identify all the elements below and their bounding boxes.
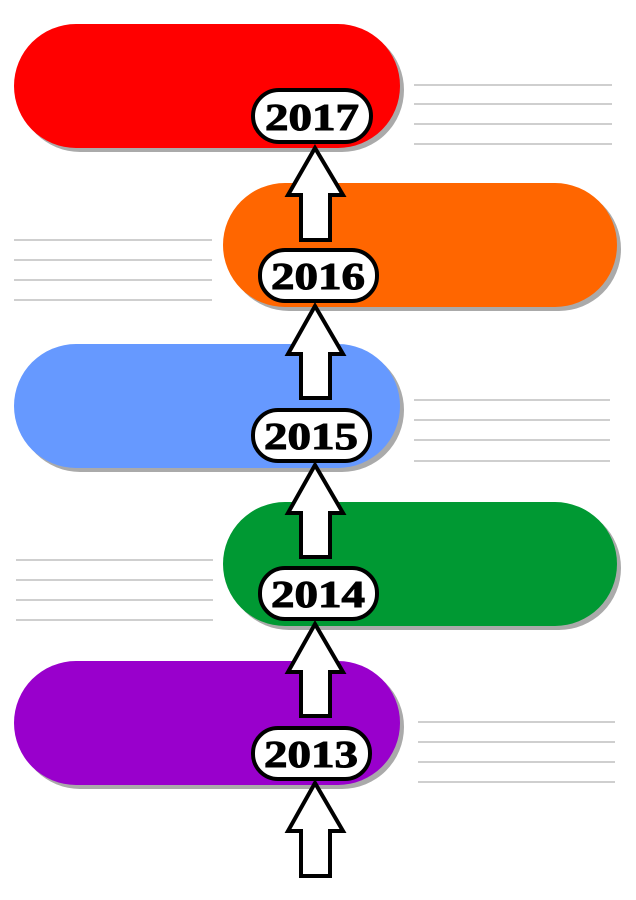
panel: 2017 red xyxy=(14,24,404,152)
text lines right 2013 xyxy=(418,722,615,782)
text lines left 2016 xyxy=(14,240,212,300)
arrow 2016 to 2017 xyxy=(288,148,343,240)
label 2016 xyxy=(260,250,377,301)
label 2015 xyxy=(253,410,370,461)
label 2014: 2014 xyxy=(271,574,365,616)
label 2014 xyxy=(260,568,377,619)
text lines right 2017 xyxy=(414,85,612,144)
arrow 2014 to 2015 xyxy=(288,465,343,557)
label 2013: 2013 xyxy=(264,734,358,776)
label 2013 xyxy=(253,728,370,779)
label 2017 xyxy=(253,90,371,142)
arrow below 2013 xyxy=(288,783,343,876)
arrow 2013 to 2014 xyxy=(288,624,343,716)
panel: 2016 orange xyxy=(223,183,621,311)
label 2017: 2017 xyxy=(265,97,359,139)
text lines right 2015 xyxy=(414,400,610,461)
panel: 2014 green xyxy=(223,502,621,630)
text lines left 2014 xyxy=(16,560,213,620)
arrow 2015 to 2016 xyxy=(288,306,343,398)
panel: 2015 blue xyxy=(14,344,404,472)
label 2016: 2016 xyxy=(271,256,365,298)
label 2015: 2015 xyxy=(264,416,358,458)
panel: 2013 purple xyxy=(14,661,404,789)
